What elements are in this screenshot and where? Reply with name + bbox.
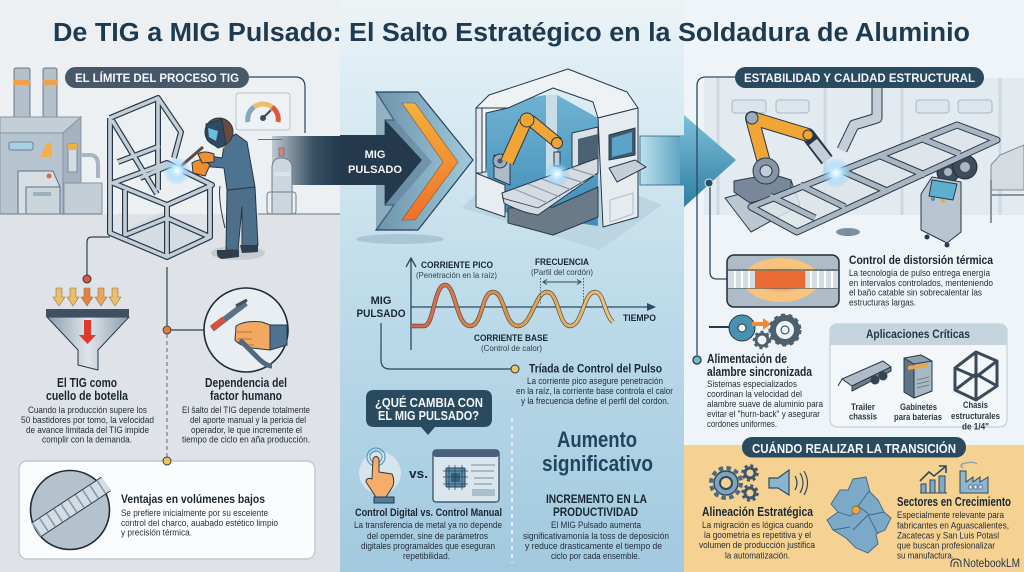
card labels xyxy=(849,400,1000,432)
connector: frame to funnel xyxy=(87,237,110,275)
speech bubble: EL MIG PULSADO? xyxy=(378,408,479,423)
pulse current chart xyxy=(356,257,656,353)
welding spark xyxy=(163,157,191,185)
text: aumento significativo: significativamonía la toss de deposición xyxy=(523,531,669,542)
big chevron arrow: PULSADO xyxy=(348,164,402,176)
section pill: estabilidad xyxy=(735,67,984,88)
panel: cuándo realizar la transición xyxy=(699,437,1020,570)
big chevron arrow: MIG xyxy=(365,149,385,161)
gauge icon xyxy=(236,93,290,130)
text: aumento significativo: Aumento xyxy=(557,427,637,452)
text: aumento significativo: PRODUCTIVIDAD xyxy=(553,505,638,519)
card: ventajas en volúmenes bajos xyxy=(19,461,315,559)
text: alimentación de alambre: evitar el "hurn-back" y asegurar xyxy=(707,409,821,420)
text: control de distorsión térmica: estructuras largas. xyxy=(849,298,916,308)
text: control de distorsión térmica: en intervalos controlados, menteniendo xyxy=(849,278,993,289)
text: factor humano: tiempo de ciclo en aña producción. xyxy=(182,434,310,446)
text: sectores en crecimiento xyxy=(897,495,1011,562)
factory wall backdrop xyxy=(684,78,1024,255)
icon: factory xyxy=(960,462,988,493)
text: tríada de control del pulso: en la raíz, la corriente base controla el calor xyxy=(516,386,674,397)
card: ventajas en volúmenes bajos: Se prefiere inicialmente por su esceiente xyxy=(121,508,268,519)
icon: wire feed and gears xyxy=(709,315,800,348)
text: sectores en crecimiento: Zacatecas y San Luis Potasl xyxy=(897,530,999,542)
equipment table xyxy=(991,145,1024,223)
icon: growth chart xyxy=(920,466,947,493)
text: control de distorsión térmica: el baño catable sin sobrecalentar las xyxy=(849,288,982,298)
node: orange dot xyxy=(83,275,91,283)
section pill: estabilidad: ESTABILIDAD Y CALIDAD ESTRUCTURAL xyxy=(744,71,975,85)
speech bubble xyxy=(366,390,492,435)
text: TIG bottleneck: cuello de botella xyxy=(46,389,129,403)
card labels: de 1/4" xyxy=(962,422,989,432)
text: aumento significativo: El MIG Pulsado aumenta xyxy=(551,520,642,531)
card labels: Gabinetes xyxy=(900,402,937,412)
text: sectores en crecimiento: su manufactura. xyxy=(897,550,954,562)
icon: touch hand xyxy=(359,448,401,503)
text: TIG bottleneck xyxy=(21,376,154,446)
text: factor humano: Dependencia del xyxy=(205,376,287,390)
text: alimentación de alambre: cordones uniformes. xyxy=(707,419,777,430)
node: card dot xyxy=(163,457,171,465)
dark input band xyxy=(272,136,340,185)
text: aumento significativo: y reduce drasticamente el tiempo de xyxy=(525,541,662,552)
node: tríada dot xyxy=(511,365,519,373)
panel: MIG pulsado xyxy=(340,69,687,563)
text: factor humano: operador, le que incremente el xyxy=(191,425,302,436)
card: ventajas en volúmenes bajos: y precisión térmica. xyxy=(121,528,192,538)
control cabinet xyxy=(921,177,961,248)
connector: frame to factor humano xyxy=(167,267,205,330)
section pill: cuándo realizar xyxy=(742,437,966,458)
text: aumento significativo: ciclo por cada ensemble. xyxy=(551,551,640,562)
background: middle panel xyxy=(340,0,684,572)
text: tríada de control del pulso: La corriente pico asegure penetración xyxy=(527,376,663,387)
big chevron arrow xyxy=(340,92,473,244)
connector: panel outer line xyxy=(697,77,735,355)
card labels: Chasis xyxy=(963,400,988,410)
text: factor humano xyxy=(182,376,310,446)
gas cylinder xyxy=(258,139,296,214)
panel: estabilidad y calidad estructural xyxy=(680,67,1024,432)
text: alineación estratégica: Alineación Estratégica xyxy=(702,504,814,519)
text: alineación estratégica: la automatización. xyxy=(725,550,790,562)
section pill: cuándo realizar: CUÁNDO REALIZAR LA TRANSICIÓN xyxy=(752,441,956,456)
text: alimentación de alambre: Alimentación de xyxy=(707,351,787,366)
text: control digital vs manual: repetibilidad. xyxy=(403,551,450,562)
text: alineación estratégica: la goometria es repetitiva y el xyxy=(704,530,811,541)
text: aumento significativo: INCREMENTO EN LA xyxy=(546,492,647,506)
pulse current chart: CORRIENTE PICO xyxy=(421,260,493,271)
funnel icon xyxy=(46,288,129,370)
text: TIG bottleneck: de avance limitada del TIG impide xyxy=(26,425,149,436)
text: alineación estratégica: volumen de producción justifica xyxy=(699,540,816,551)
text: control digital vs manual: La transferencia de metal ya no depende xyxy=(354,520,502,531)
text: alimentación de alambre: Sistemas especializados xyxy=(707,379,797,390)
text: TIG bottleneck: 50 bastidores por tomo, la velocidad xyxy=(21,415,154,426)
text: sectores en crecimiento: fabricantes en Aguascalientes, xyxy=(897,520,1009,532)
text: tríada de control del pulso: Tríada de Control del Pulso xyxy=(529,362,662,376)
icon: gears xyxy=(711,466,758,500)
icon: digital interface window xyxy=(433,450,499,502)
card: weld heat xyxy=(727,255,839,307)
text: TIG bottleneck: El TIG como xyxy=(57,376,117,390)
icon: trailer xyxy=(838,361,891,391)
pulse current chart: CORRIENTE BASE xyxy=(474,333,548,344)
map of Mexican states xyxy=(827,477,891,553)
text: alimentación de alambre: alambre suave de aluminio para xyxy=(707,399,824,410)
floor line xyxy=(0,213,340,215)
text: aumento significativo xyxy=(523,427,669,562)
pulse current chart: PULSADO xyxy=(356,308,406,320)
card labels: para baterías xyxy=(894,412,942,422)
node: connector dot xyxy=(163,326,171,334)
factory illustration xyxy=(0,68,102,214)
background: left panel xyxy=(0,0,340,572)
text: alineación estratégica xyxy=(699,504,816,562)
text: TIG bottleneck: Cuando la producción supere los xyxy=(28,405,147,416)
text: tríada de control del pulso: y la frecuencia define el perfil del cordon. xyxy=(521,396,669,407)
vs label: vs. xyxy=(409,467,428,481)
connector: chart to tríada xyxy=(381,323,512,369)
arrow head: into stability section xyxy=(680,115,736,207)
card: aplicaciones críticas xyxy=(830,324,1007,432)
icon: structural chassis xyxy=(955,352,997,400)
dashed divider xyxy=(511,418,513,563)
pulse current chart: (Penetración en la raíz) xyxy=(416,270,497,280)
robotic welding cell xyxy=(462,69,662,250)
text: alimentación de alambre: alambre sincronizada xyxy=(707,364,813,379)
trailer frame with robots xyxy=(725,88,997,236)
icon: speaker xyxy=(769,470,808,495)
pulse current chart: FRECUENCIA xyxy=(535,257,589,268)
text: TIG bottleneck: complir con la demanda. xyxy=(42,434,132,446)
panel: el límite del proceso TIG xyxy=(0,67,340,559)
connector: pill to gauge xyxy=(249,77,305,133)
icon: weld bead xyxy=(30,470,110,550)
text: sectores en crecimiento: que buscan profesionalizar xyxy=(897,540,996,552)
text: control digital vs manual: del opernder, sine de parámetros xyxy=(367,531,488,542)
welding frame xyxy=(110,98,212,257)
text: control digital vs manual xyxy=(354,507,502,562)
pulse current chart: MIG xyxy=(371,295,391,307)
section pill: el límite del proceso TIG: EL LÍMITE DEL PROCESO TIG xyxy=(75,70,239,85)
node: arrow dot xyxy=(705,179,713,187)
text: aumento significativo: significativo xyxy=(542,451,653,476)
text: tríada de control del pulso xyxy=(516,362,674,407)
text: alineación estratégica: La migración es lógica cuando xyxy=(702,520,813,531)
icon: battery cabinet xyxy=(904,355,932,398)
title: De TIG a MIG Pulsado: El Salto Estratégico en la Soldadura de Aluminio xyxy=(53,19,970,47)
pulse current chart: TIEMPO xyxy=(623,313,656,324)
node: wire feed xyxy=(693,356,701,364)
text: control digital vs manual: Control Digital vs. Control Manual xyxy=(355,507,502,519)
connector: arrow to weld card xyxy=(710,187,727,279)
text: control de distorsión térmica xyxy=(849,253,993,308)
band behind cell xyxy=(640,136,687,185)
text: factor humano: factor humano xyxy=(210,389,282,403)
speech bubble: ¿QUÉ CAMBIA CON xyxy=(375,395,483,410)
dashed connector xyxy=(166,334,168,457)
card labels: chassis xyxy=(849,412,877,422)
welder figure xyxy=(180,118,265,260)
text: factor humano: El šalto del TIG depende totalmente xyxy=(182,405,310,416)
text: control de distorsión térmica: La tecnología de pulso entrega energía xyxy=(849,268,991,279)
text: control digital vs manual: digitales programaldes que eseguran xyxy=(361,541,495,552)
card: aplicaciones críticas: Aplicaciones Críticas xyxy=(866,327,970,341)
text: factor humano: del aporte manual y la pericia del xyxy=(190,415,306,426)
text: alimentación de alambre xyxy=(707,351,824,430)
section pill: el límite del proceso TIG xyxy=(65,67,249,88)
background: right panel xyxy=(684,0,1024,572)
text: alimentación de alambre: coordinan la velocidad del xyxy=(707,389,802,400)
text: control de distorsión térmica: Control de distorsión térmica xyxy=(849,253,993,267)
card: ventajas en volúmenes bajos: control del charco, auabado estético limpio xyxy=(121,518,278,529)
icon: hand with torch xyxy=(204,288,288,372)
card labels: Trailer xyxy=(851,402,875,412)
pulse current chart: (Partil del cordón) xyxy=(531,267,593,277)
text: sectores en crecimiento: Especialmente relevante para xyxy=(897,510,1005,521)
card labels: estructurales xyxy=(951,411,1000,421)
card: ventajas en volúmenes bajos: Ventajas en volúmenes bajos xyxy=(121,492,265,506)
pulse current chart: (Control de calor) xyxy=(481,343,542,353)
